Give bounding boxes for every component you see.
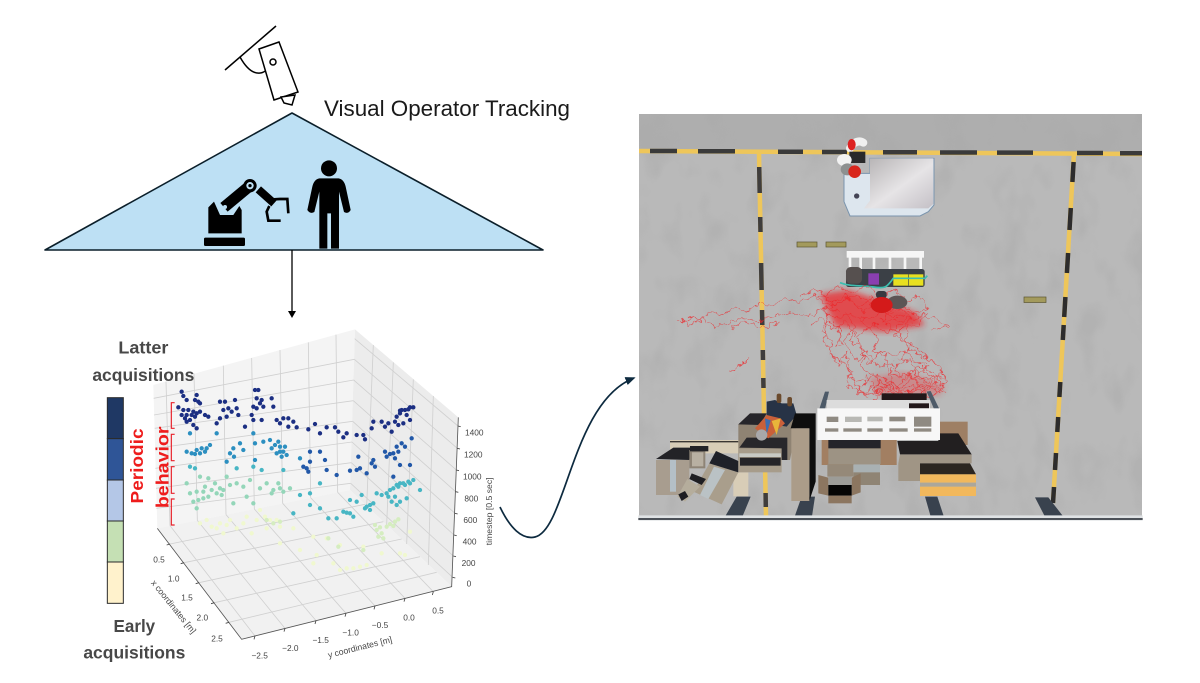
tick labels: x axis: 1.0 <box>168 573 180 583</box>
panel: 3D scatter chart <box>83 329 494 663</box>
scatter: latter acquisitions <box>178 390 413 439</box>
label: early acquisitions <box>83 616 185 663</box>
left boxes and operator <box>656 394 816 504</box>
tick labels: timestep axis: 600 <box>463 515 478 525</box>
small rack with parts <box>840 251 927 288</box>
tick labels: x axis: 2.0 <box>197 613 208 623</box>
tick labels: timestep axis: 200 <box>462 558 476 568</box>
front middle box <box>738 438 787 472</box>
hazard tape lines <box>639 151 1142 516</box>
tick labels: x axis <box>153 554 223 643</box>
robot base plate <box>844 158 934 216</box>
tick labels: y axis: −1.0 <box>342 627 359 637</box>
axis title: x coordinates: x coordinates [m] <box>149 578 198 636</box>
small upright box <box>689 446 708 468</box>
label: behavior: behavior <box>152 426 172 508</box>
icon: ceiling camera <box>225 26 298 105</box>
label: early acquisitions: acquisitions <box>83 643 185 663</box>
arrow: down to chart <box>288 250 296 318</box>
operator trajectories <box>678 285 948 400</box>
center front box <box>828 440 881 464</box>
arrow: chart to scene <box>500 378 634 537</box>
right tan box <box>939 422 968 445</box>
label: latter acquisitions: acquisitions <box>92 365 194 385</box>
scatter: middle acquisitions <box>187 467 420 518</box>
tick labels: timestep axis: 400 <box>463 537 477 547</box>
label: latter acquisitions <box>92 337 194 385</box>
concrete floor <box>639 114 1142 520</box>
tick labels: timestep axis <box>462 427 484 589</box>
tick labels: y axis: −0.5 <box>372 620 389 630</box>
olive floor markers <box>797 242 1046 302</box>
tick labels: x axis: 2.5 <box>211 633 223 643</box>
label: latter acquisitions: Latter <box>118 337 168 357</box>
tick labels: y axis: −2.5 <box>251 650 268 660</box>
pallet <box>670 440 748 496</box>
tick labels: timestep axis: 800 <box>464 493 479 503</box>
orange box <box>920 463 976 496</box>
scatter: early acquisitions <box>200 510 410 570</box>
axis title: y coordinates: y coordinates [m] <box>327 634 393 660</box>
tall box <box>791 413 816 501</box>
tick labels: timestep axis: 1000 <box>463 472 482 482</box>
back tan box <box>822 438 897 465</box>
robot arm <box>837 139 865 178</box>
operator lying figure <box>755 394 797 441</box>
center and right boxes <box>817 391 976 503</box>
label: early acquisitions: Early <box>113 616 155 636</box>
scatter: later blue acquisitions <box>187 433 412 477</box>
panel: 3D workcell scene <box>638 114 1143 521</box>
field of view triangle <box>45 113 543 250</box>
bottom rails and edge <box>638 497 1143 521</box>
tick labels: x axis: 1.5 <box>181 592 193 602</box>
tick labels: timestep axis: 0 <box>467 579 472 589</box>
tick labels: timestep axis: 1400 <box>465 427 484 437</box>
lower boxes <box>827 464 880 485</box>
axis title: timestep: timestep [0.5 sec] <box>484 477 494 545</box>
label: periodic: Periodic <box>127 428 147 503</box>
periodic brackets <box>171 403 175 525</box>
icon: robot arm <box>204 179 288 246</box>
gripper hub <box>871 291 907 313</box>
open box <box>818 473 861 503</box>
panel: visual operator tracking diagram <box>45 26 570 318</box>
tick labels: x axis: 0.5 <box>153 554 165 564</box>
3D axes panes <box>153 329 461 639</box>
tick labels: y axis: −2.0 <box>282 643 299 653</box>
tick labels: y axis: 0.5 <box>432 606 444 616</box>
white rack <box>817 391 940 440</box>
large left box <box>656 448 691 495</box>
rear middle box <box>738 413 797 460</box>
tick labels: timestep axis: 1200 <box>464 449 483 459</box>
right stack <box>897 433 972 481</box>
tick labels: y axis <box>251 606 444 660</box>
tick labels: y axis: 0.0 <box>403 613 415 623</box>
tipped small box <box>677 473 706 502</box>
rotated box <box>693 451 738 504</box>
colour legend bar <box>107 398 123 603</box>
heading: Visual Operator Tracking: Visual Operator Tracking <box>324 96 570 121</box>
icon: human operator <box>307 160 351 249</box>
robot on base plate <box>837 139 934 216</box>
tick labels: y axis: −1.5 <box>312 635 329 645</box>
